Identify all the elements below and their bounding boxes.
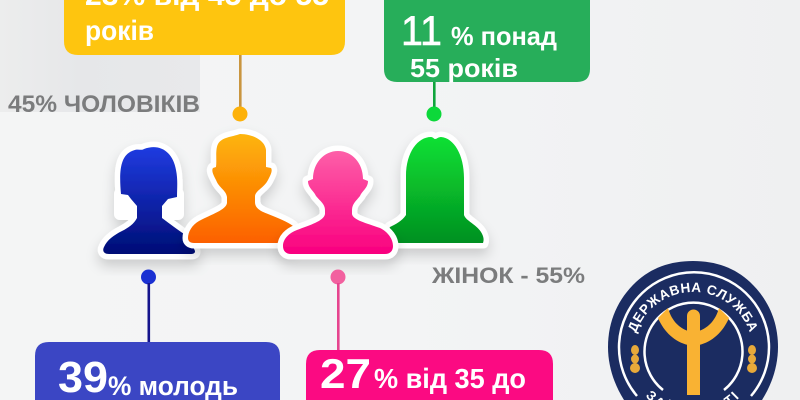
panel: green 11%: 55 років xyxy=(410,53,518,83)
panel: green 11%: 11 xyxy=(401,7,442,54)
label: men share: 45% ЧОЛОВІКІВ xyxy=(8,91,200,118)
panel: pink 27%: 27 xyxy=(320,350,371,397)
panel: blue 39% xyxy=(35,342,280,400)
panel: green 11%: % понад xyxy=(451,21,557,51)
icon: wheat right xyxy=(747,345,757,373)
icon: wheat left xyxy=(630,345,640,373)
connector: green xyxy=(426,82,442,122)
icon: orange person xyxy=(188,134,293,243)
connector: pink xyxy=(330,270,346,350)
panel: green 11% xyxy=(384,0,590,83)
logo: employment service badge xyxy=(608,261,778,400)
icon: green person xyxy=(389,137,484,243)
label: women share: ЖІНОК - 55% xyxy=(431,263,585,288)
icon: blue person xyxy=(103,147,195,254)
logo: employment service badge: ДЕРЖАВНА СЛУЖБА xyxy=(628,282,757,334)
panel: yellow 23% xyxy=(64,0,345,55)
connector: blue xyxy=(141,270,156,342)
panel: yellow 23%: років xyxy=(85,15,154,46)
icon: pink person xyxy=(283,151,393,254)
panel: pink 27%: % від 35 до xyxy=(374,363,526,394)
panel: pink 27% xyxy=(306,350,553,400)
connector: yellow xyxy=(232,55,248,122)
icon: yellow symbol xyxy=(658,308,729,395)
